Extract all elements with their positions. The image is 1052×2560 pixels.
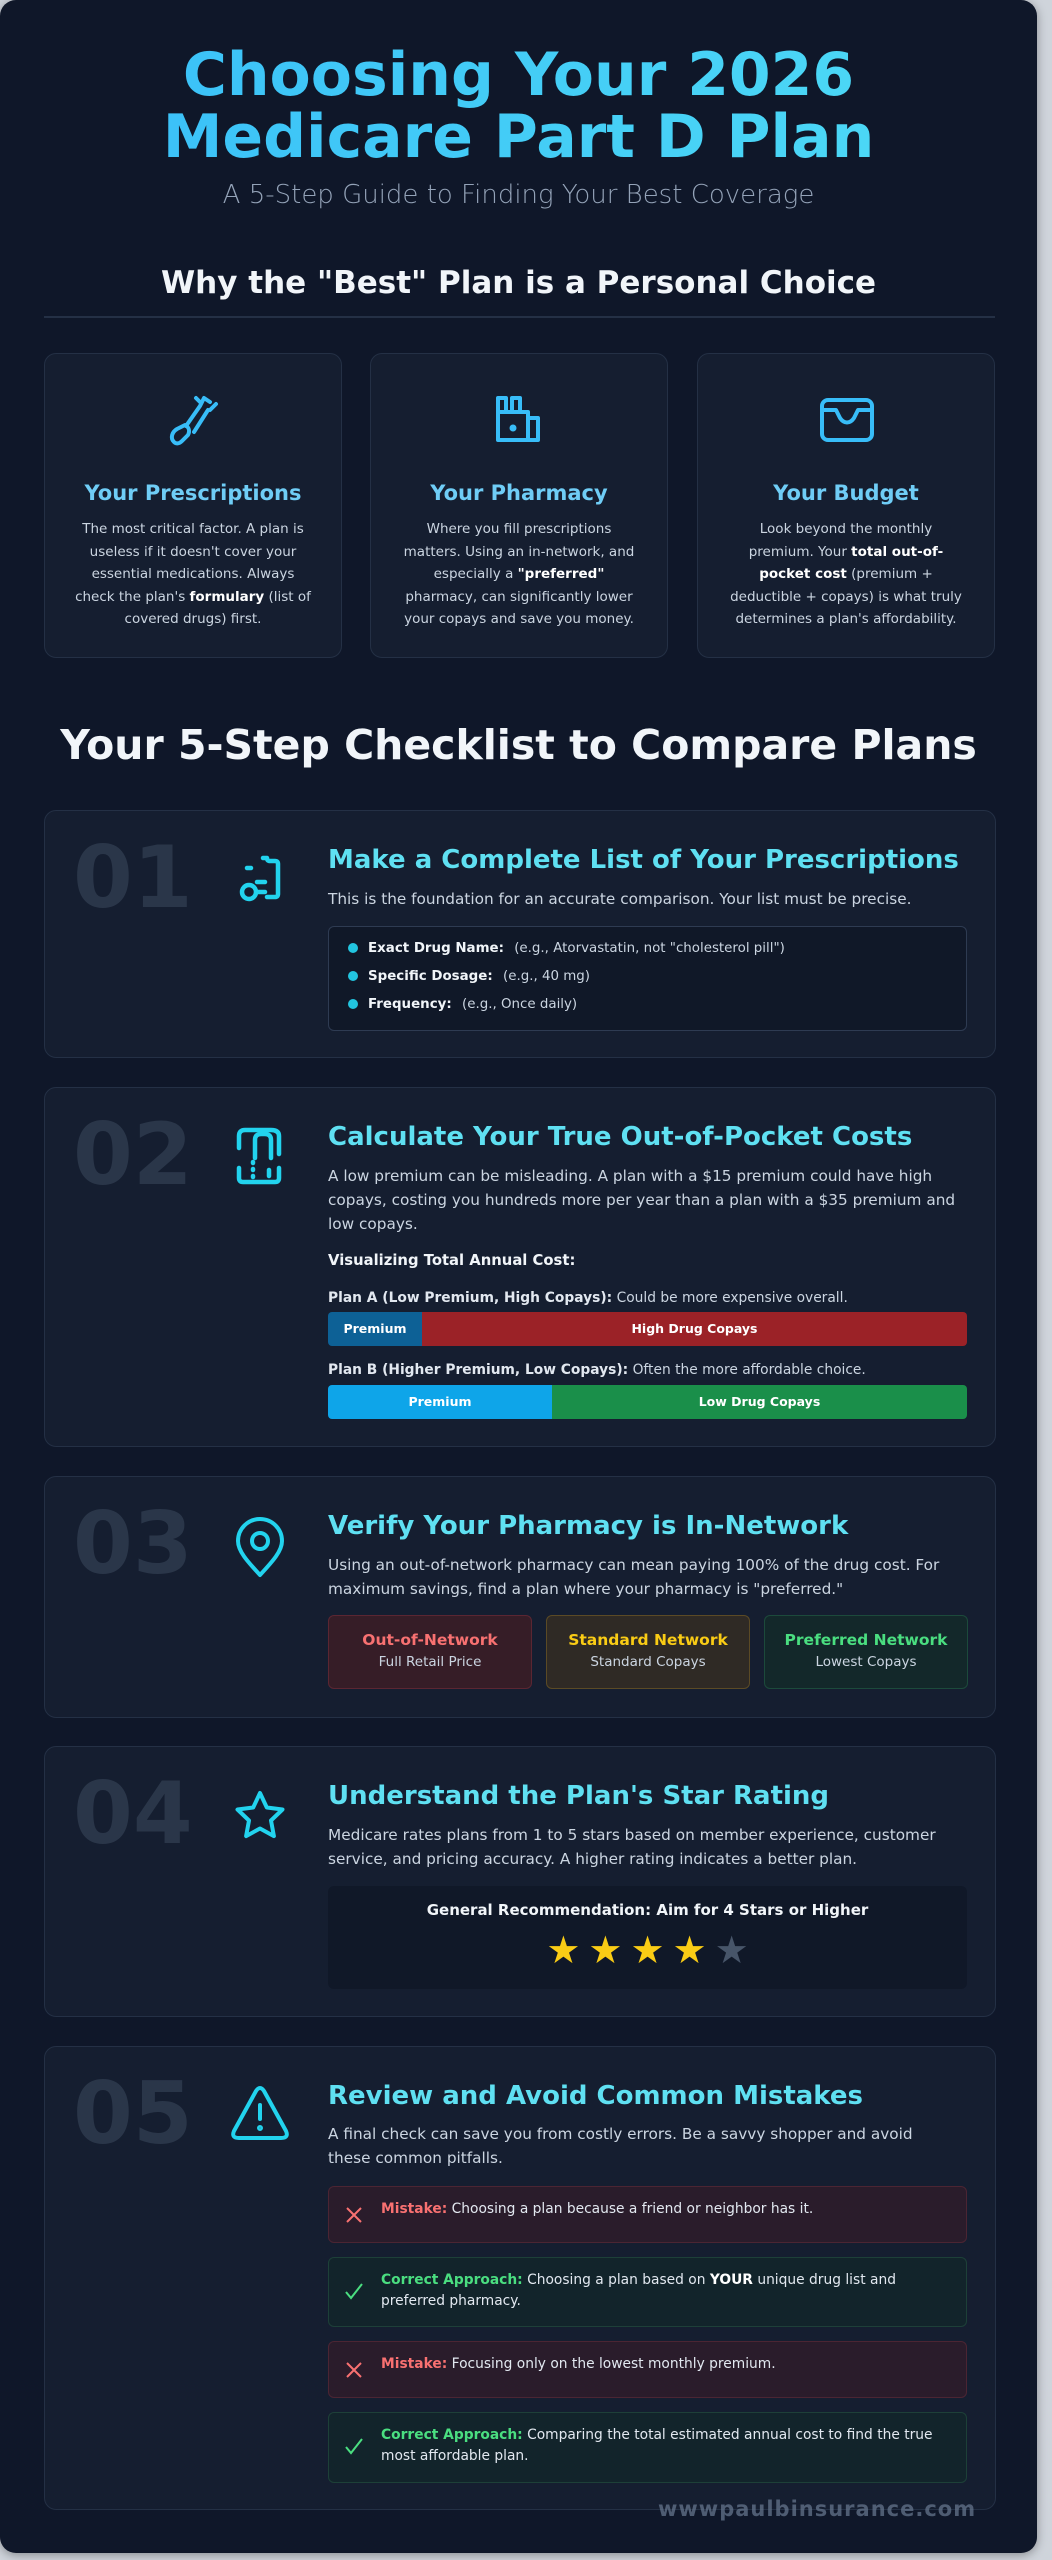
- title: [0, 44, 1037, 168]
- step description: Medicare rates plans from 1 to 5 stars based on member experience, customer service, and pricing accuracy. A higher rating indicates a better plan.: [328, 1826, 936, 1868]
- step description: Using an out-of-network pharmacy can mean paying 100% of the drug cost. For maximum savings, find a plan where your pharmacy is "preferred.": [328, 1556, 939, 1598]
- step title: Verify Your Pharmacy is In-Network: [328, 1511, 848, 1541]
- step title: Review and Avoid Common Mistakes: [328, 2081, 863, 2111]
- icon: prescription list: [240, 856, 280, 902]
- icon: pharmacy: [496, 396, 540, 442]
- watermark: wwwpaulbinsurance.com: [658, 2497, 976, 2521]
- item: drug name: Exact Drug Name: (e.g., Atorvastatin, not "cholesterol pill"): [368, 941, 785, 956]
- mistake 1: [328, 2186, 967, 2243]
- card text: The most critical factor. A plan is useless if it doesn't cover your essential medications. Always check the plan's formulary (list of covered drugs) first.: [75, 521, 311, 627]
- plan B label: Plan B (Higher Premium, Low Copays): Often the more affordable choice.: [328, 1362, 866, 1378]
- correct approach 2: [328, 2412, 967, 2483]
- panel: step 4: [44, 1746, 996, 2017]
- step number: 04: [73, 1764, 193, 1864]
- icon: receipt: [236, 1128, 282, 1184]
- panel: step 2: [44, 1087, 996, 1447]
- title: Choosing Your 2026: [183, 40, 854, 110]
- checklist box: [328, 926, 967, 1031]
- step number: 02: [73, 1105, 193, 1205]
- recommendation text: General Recommendation: Aim for 4 Stars or Higher: [427, 1901, 868, 1919]
- mistake 2: Mistake: Focusing only on the lowest monthly premium.: [381, 2356, 776, 2372]
- star rating: ★★★★★: [546, 1928, 757, 1972]
- card text: Where you fill prescriptions matters. Using an in-network, and especially a "preferred" pharmacy, can significantly lower your copays and save you money.: [404, 521, 634, 627]
- panel: your prescriptions: [44, 353, 342, 658]
- panel: your budget: [697, 353, 995, 658]
- correct approach 1: Correct Approach: Choosing a plan based on YOUR unique drug list and preferred pharmacy.: [381, 2272, 896, 2309]
- step title: Calculate Your True Out-of-Pocket Costs: [328, 1122, 912, 1152]
- tier: standard: Standard Network: [568, 1631, 728, 1649]
- mistake 1: Mistake: Choosing a plan because a friend or neighbor has it.: [381, 2201, 813, 2217]
- step description: This is the foundation for an accurate comparison. Your list must be precise.: [328, 890, 911, 908]
- panel: step 1: [44, 810, 996, 1058]
- title: Medicare Part D Plan: [163, 102, 874, 172]
- card title: Your Budget: [773, 481, 919, 505]
- bar chart: plan A: Premium: [343, 1321, 407, 1336]
- bar chart: plan B: [328, 1385, 967, 1419]
- tier: out of network: Full Retail Price: [379, 1654, 481, 1670]
- panel: step 5: [44, 2046, 996, 2510]
- heading: 5-step checklist: Your 5-Step Checklist to Compare Plans: [60, 721, 977, 769]
- step description: A low premium can be misleading. A plan with a $15 premium could have high copays, costing you hundreds more per year than a plan with a $35 premium and low copays.: [328, 1167, 955, 1233]
- icon: pill: [170, 396, 218, 446]
- correct approach 2: Correct Approach: Comparing the total estimated annual cost to find the true most affordable plan.: [381, 2427, 933, 2464]
- step description: A final check can save you from costly errors. Be a savvy shopper and avoid these common pitfalls.: [328, 2125, 913, 2167]
- tier: out of network: [328, 1615, 532, 1689]
- icon: star: [235, 1790, 284, 1838]
- item: frequency: Frequency: (e.g., Once daily): [368, 997, 577, 1012]
- tier: standard: [546, 1615, 750, 1689]
- chart heading: Visualizing Total Annual Cost:: [328, 1252, 575, 1269]
- tier: preferred: Lowest Copays: [815, 1654, 917, 1670]
- item: dosage: Specific Dosage: (e.g., 40 mg): [368, 969, 590, 984]
- tier: standard: Standard Copays: [590, 1654, 706, 1670]
- step title: Understand the Plan's Star Rating: [328, 1781, 829, 1811]
- card title: Your Pharmacy: [430, 481, 608, 505]
- panel: your pharmacy: [370, 353, 668, 658]
- panel: step 3: [44, 1476, 996, 1718]
- step title: Make a Complete List of Your Prescriptions: [328, 845, 959, 875]
- tier: preferred: Preferred Network: [785, 1631, 947, 1649]
- card text: Look beyond the monthly premium. Your total out-of-pocket cost (premium + deductible + copays) is what truly determines a plan's affordability.: [730, 521, 962, 627]
- bar chart: plan B: Premium: [408, 1394, 472, 1409]
- heading: why best plan personal: Why the "Best" Plan is a Personal Choice: [161, 265, 876, 301]
- card title: Your Prescriptions: [85, 481, 301, 505]
- tier: out of network: Out-of-Network: [362, 1631, 498, 1649]
- mistake 2: [328, 2341, 967, 2398]
- step number: 03: [73, 1494, 193, 1594]
- subtitle: A 5-Step Guide to Finding Your Best Coverage: [223, 180, 814, 210]
- bar chart: plan A: High Drug Copays: [631, 1321, 758, 1336]
- step number: 05: [73, 2064, 193, 2164]
- step number: 01: [73, 828, 193, 928]
- icon: wallet: [820, 398, 874, 442]
- tier: preferred: [764, 1615, 968, 1689]
- plan A label: Plan A (Low Premium, High Copays): Could be more expensive overall.: [328, 1290, 848, 1306]
- bar chart: plan A: [328, 1312, 967, 1346]
- icon: warning: [231, 2086, 289, 2140]
- icon: location pin: [236, 1517, 284, 1578]
- recommendation box: [328, 1886, 967, 1989]
- bar chart: plan B: Low Drug Copays: [699, 1394, 820, 1409]
- correct approach 1: [328, 2257, 967, 2327]
